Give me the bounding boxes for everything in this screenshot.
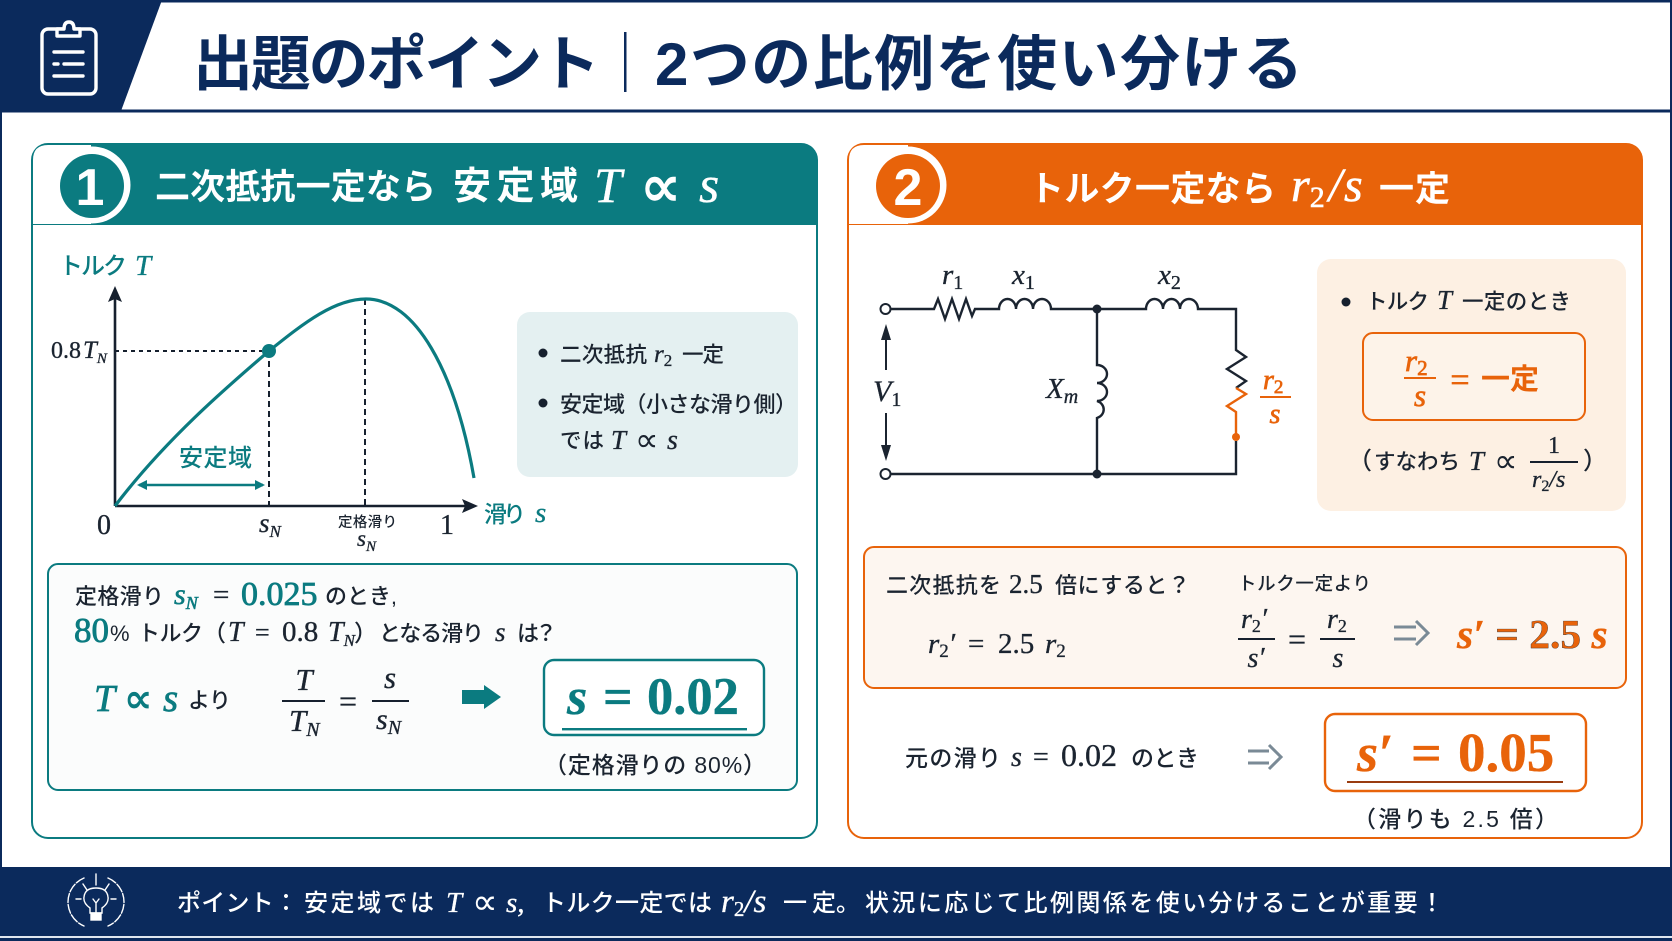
panel 2 header: s <box>1344 159 1363 212</box>
callout: conditions: T <box>611 425 628 455</box>
original slip line: s <box>1011 742 1022 773</box>
takeaway text: ∝ <box>472 882 498 923</box>
panel 2 header <box>848 144 1642 225</box>
comparison box: 2 <box>939 641 949 662</box>
callout: constant torque condition: T <box>1437 285 1454 315</box>
orange load resistor <box>1227 388 1246 437</box>
circuit diagram <box>873 259 1291 479</box>
takeaway text: 2 <box>734 897 744 921</box>
panel 1 header: s <box>699 157 719 214</box>
voltage arrows <box>873 324 901 461</box>
inverse proportional note: r <box>1532 467 1541 493</box>
comparison box: = <box>1288 621 1306 657</box>
question text: のとき, <box>325 584 397 609</box>
inverse proportional note: ∝ <box>1494 441 1518 480</box>
x axis label <box>484 497 546 529</box>
panel: stable region proportional rule <box>32 144 817 838</box>
stable region marker <box>139 445 263 485</box>
torque curve <box>115 299 474 506</box>
component labels: r <box>942 259 953 291</box>
question text: ） <box>354 620 377 646</box>
formula: T proportional to s <box>94 660 409 741</box>
header band <box>0 0 1672 112</box>
axis tick labels <box>51 337 454 555</box>
inverse proportional note: すなわち <box>1374 450 1460 474</box>
result box <box>1325 714 1586 791</box>
callout: conditions <box>517 312 798 477</box>
axes <box>108 286 478 513</box>
axis tick labels: N <box>96 351 108 367</box>
formula: T proportional to s: N <box>305 719 321 741</box>
icon: light bulb <box>68 874 124 926</box>
inverse proportional note: ） <box>1583 448 1607 475</box>
component labels: x <box>1012 259 1025 291</box>
panel 2 header: / <box>1326 159 1346 212</box>
takeaway text: 一定 <box>783 890 836 917</box>
comparison box: r <box>928 628 939 660</box>
guide lines <box>115 299 365 506</box>
axis tick labels: N <box>269 522 283 541</box>
formula: T proportional to s: s <box>376 703 388 736</box>
x axis label: s <box>535 497 546 529</box>
footer band <box>0 867 1672 941</box>
icon: clipboard <box>42 22 96 94</box>
formula: T proportional to s: s <box>384 660 396 695</box>
takeaway text: 状況に応じて比例関係を使い分けることが重要！ <box>865 890 1444 917</box>
takeaway text: ポイント： <box>177 890 298 917</box>
callout: conditions: 安定域（小さな滑り側） <box>560 392 797 417</box>
takeaway text: r <box>721 884 734 920</box>
panel 1 header <box>32 144 817 225</box>
formula box: s <box>1414 378 1426 413</box>
callout: conditions: r <box>654 341 664 368</box>
callout: conditions: ∝ <box>635 420 659 459</box>
formula: T proportional to s: s <box>163 677 178 720</box>
voltage arrows: 1 <box>891 389 901 411</box>
inverse proportional note: （ <box>1348 448 1372 475</box>
load label <box>1260 365 1291 430</box>
panel 1 header: 二次抵抗一定なら <box>155 168 436 207</box>
question text: N <box>185 593 199 613</box>
comparison box: ′ <box>1261 604 1268 635</box>
axis tick labels: 定格滑り <box>338 514 397 531</box>
formula: T proportional to s: N <box>387 717 403 739</box>
question text: N <box>343 631 357 650</box>
callout: conditions: s <box>667 425 678 456</box>
circuit wires <box>891 299 1246 388</box>
load label: r <box>1263 365 1274 396</box>
panel 2 header: r <box>1291 159 1310 212</box>
question text: T <box>228 617 246 648</box>
result box: 0.05 <box>1458 722 1554 783</box>
header navy tab <box>0 0 162 111</box>
y axis label: トルク <box>59 253 127 280</box>
axis tick labels: T <box>83 337 97 364</box>
axis tick labels: 0.8 <box>51 338 81 364</box>
panel 1 header: ∝ <box>640 152 681 220</box>
component labels: 2 <box>1171 272 1181 294</box>
question text: s <box>174 578 186 611</box>
takeaway text: 安定域では <box>304 890 434 917</box>
component labels: x <box>1158 259 1171 291</box>
y axis label <box>59 250 153 282</box>
axis tick labels: N <box>365 539 377 555</box>
question text: = <box>255 618 270 647</box>
callout: conditions: 二次抵抗 <box>560 343 647 367</box>
comparison box: 2 <box>1056 641 1066 662</box>
question text: 0.8 <box>282 616 318 648</box>
formula box: r <box>1405 343 1417 378</box>
formula box: = <box>1450 362 1470 399</box>
takeaway text: トルク一定では <box>542 890 712 917</box>
formula: T proportional to s: より <box>188 688 231 713</box>
original slip line <box>905 737 1281 773</box>
panel 2 header: 2 <box>1310 181 1325 214</box>
callout: constant torque condition: 一定のとき <box>1462 290 1571 314</box>
original slip line: のとき <box>1131 745 1199 771</box>
panel 1 header: 安定域 <box>453 166 578 208</box>
panel: constant torque rule <box>848 144 1642 838</box>
original slip line: 0.02 <box>1061 737 1117 773</box>
formula: T proportional to s: T <box>94 678 118 720</box>
question text: T <box>328 617 344 648</box>
comparison box: 倍にすると？ <box>1055 573 1190 598</box>
takeaway text: T <box>446 887 464 919</box>
takeaway text: 。 <box>836 890 860 917</box>
question text: s <box>495 617 506 647</box>
comparison box: トルク一定より <box>1238 573 1371 594</box>
question text <box>74 576 557 650</box>
title: 出題のポイント <box>193 31 600 98</box>
comparison box: 2 <box>1252 616 1261 636</box>
question text: = <box>213 579 229 611</box>
voltage arrows: V <box>873 375 891 408</box>
answer box: 0.02 <box>647 668 739 726</box>
inverse proportional note <box>1348 433 1607 495</box>
comparison box: 2.5 <box>1009 569 1043 599</box>
comparison box: r <box>1241 604 1252 635</box>
callout: constant torque condition <box>1317 259 1626 511</box>
result box: = <box>1411 723 1442 783</box>
takeaway text: /s <box>742 884 766 920</box>
formula: T proportional to s: T <box>295 662 315 697</box>
title <box>193 31 1303 98</box>
comparison box: s′ <box>1247 643 1265 674</box>
panel 1 header: 1 <box>76 159 104 217</box>
arrow: implies <box>1394 621 1428 645</box>
formula: T proportional to s: T <box>289 703 306 738</box>
x axis label: 滑り <box>484 501 526 527</box>
callout: conditions: では <box>560 429 604 453</box>
arrow: implies <box>1248 745 1281 769</box>
original slip line: 元の滑り <box>905 745 1001 771</box>
load label: 2 <box>1274 377 1283 398</box>
question text: （ <box>203 620 226 646</box>
comparison box: s <box>1333 643 1344 674</box>
callout: constant torque condition: トルク <box>1366 290 1429 314</box>
component labels: 1 <box>1025 272 1035 294</box>
title: 2つの比例を使い分ける <box>655 31 1303 98</box>
panel 1 header: T <box>594 157 625 213</box>
comparison box <box>864 547 1626 688</box>
question text: 80 <box>74 611 109 650</box>
question text: 定格滑り <box>75 584 164 609</box>
comparison box: 2 <box>1338 616 1347 636</box>
formula: T proportional to s: = <box>339 683 357 719</box>
result note: （滑りも 2.5 倍） <box>1353 806 1558 832</box>
answer box: s <box>566 669 587 726</box>
component labels: X <box>1046 373 1064 405</box>
result: s' = 2.5 s: s′ = 2.5 s <box>1456 611 1608 657</box>
terminals <box>880 304 890 479</box>
comparison box: ′ <box>949 628 956 660</box>
answer note: （定格滑りの 80%） <box>544 752 766 778</box>
inverse proportional note: 1 <box>1548 433 1560 459</box>
y axis label: T <box>135 250 153 282</box>
panel 2 header: 一定 <box>1379 170 1450 209</box>
load label: s <box>1270 399 1281 430</box>
axis tick labels: s <box>357 526 366 551</box>
question text: 0.025 <box>241 576 318 613</box>
panel 2 header: トルク一定なら <box>1029 170 1276 209</box>
formula: T proportional to s: ∝ <box>124 676 152 722</box>
callout: conditions: 2 <box>664 351 672 370</box>
inverse proportional note: T <box>1469 446 1486 476</box>
panel 2 header: 2 <box>894 159 922 217</box>
result box: s′ <box>1356 723 1393 783</box>
component labels: m <box>1064 386 1078 408</box>
question box <box>48 564 797 790</box>
formula box: 一定 <box>1481 363 1539 396</box>
component labels <box>942 259 1181 408</box>
takeaway text: s, <box>506 887 525 919</box>
stable region marker: 安定域 <box>179 445 252 472</box>
comparison box: r <box>1327 604 1338 635</box>
axis tick labels: s <box>259 508 270 538</box>
answer box: = <box>603 669 633 726</box>
question text: トルク <box>138 621 203 646</box>
chart: torque-slip curve <box>51 250 546 555</box>
formula box <box>1363 333 1585 420</box>
inverse proportional note: 2 <box>1541 478 1549 495</box>
comparison box: 2.5 <box>998 628 1034 660</box>
component labels: 1 <box>953 272 963 294</box>
question text: となる滑り <box>379 621 484 646</box>
takeaway text <box>177 882 1444 923</box>
axis tick labels: 0 <box>97 510 111 541</box>
original slip line: = <box>1033 742 1049 773</box>
arrow <box>462 685 501 709</box>
answer box <box>544 660 764 735</box>
formula box: 2 <box>1417 356 1428 380</box>
inverse proportional note: /s <box>1547 467 1565 493</box>
operating point <box>262 344 276 358</box>
comparison box: = <box>968 628 984 660</box>
question text: % <box>110 621 130 646</box>
comparison box: 二次抵抗を <box>886 573 1001 598</box>
axis tick labels: 1 <box>440 510 454 541</box>
comparison box: r <box>1045 628 1056 660</box>
question text: は？ <box>517 621 557 646</box>
callout: conditions: 一定 <box>682 343 724 367</box>
